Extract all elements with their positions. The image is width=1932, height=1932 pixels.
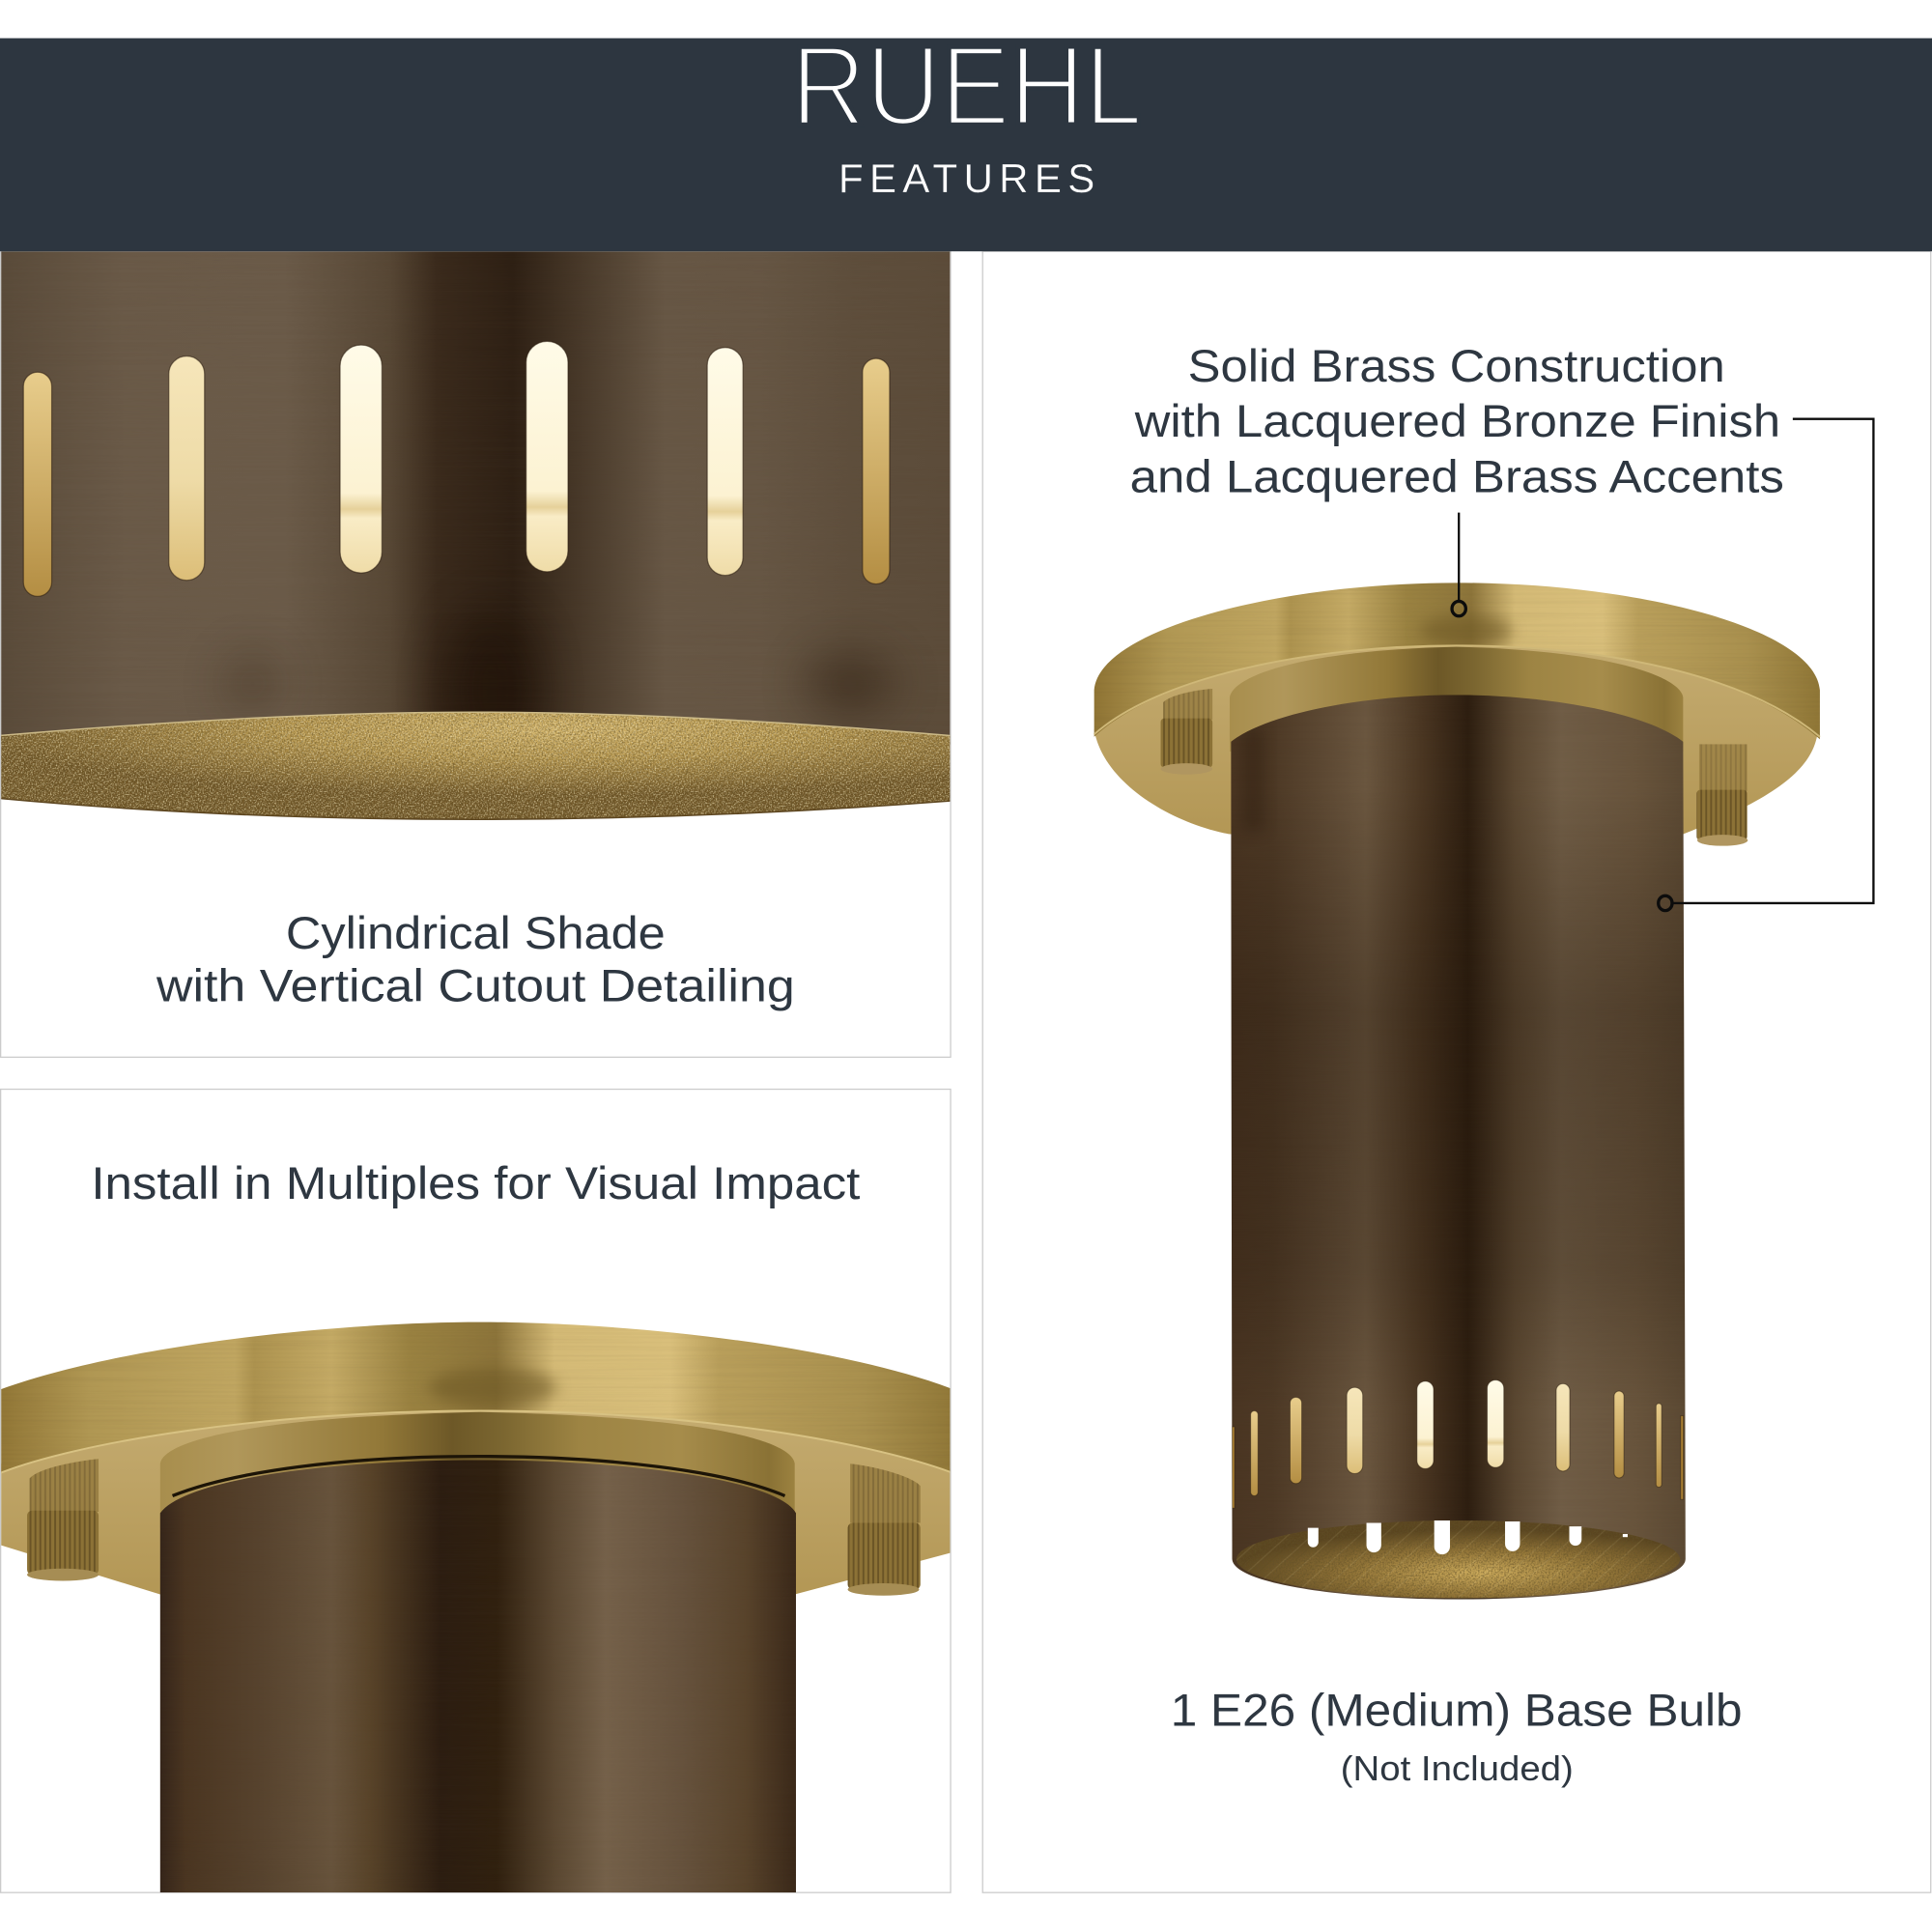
slots in shade <box>23 341 890 596</box>
knob right <box>848 1463 921 1596</box>
bronze cylinder <box>160 1460 796 1892</box>
caption: materials <box>1130 341 1784 503</box>
collar <box>160 1412 795 1513</box>
cylinder slots <box>1233 1380 1684 1508</box>
photo: canopy close-up <box>0 1322 961 1892</box>
header band <box>0 22 1932 251</box>
brand title: RUEHL <box>791 22 1142 149</box>
cylinder interior <box>1236 1520 1680 1598</box>
photo: flush mount fixture <box>1094 582 1820 1608</box>
canopy underside <box>1094 645 1817 835</box>
caption: cylindrical shade: Cylindrical Shade <box>286 908 666 959</box>
canopy underside <box>0 1410 961 1595</box>
caption: bulb type <box>1171 1685 1743 1788</box>
subtitle: FEATURES <box>838 156 1094 201</box>
caption: bulb type: 1 E26 (Medium) Base Bulb <box>1171 1685 1743 1736</box>
note: not included: (Not Included) <box>1341 1749 1574 1788</box>
collar <box>1230 647 1683 752</box>
canopy rim <box>0 1322 961 1476</box>
knob left <box>27 1459 99 1580</box>
panel: full fixture <box>982 251 1931 1892</box>
callout: brass canopy <box>1452 513 1465 616</box>
caption: cylindrical shade <box>156 908 795 1011</box>
photo: shade close-up <box>0 251 950 819</box>
canopy rim <box>1094 582 1820 739</box>
callout: bronze finish <box>1659 419 1873 911</box>
caption: materials: with Lacquered Bronze Finish <box>1134 396 1780 447</box>
caption: cylindrical shade: with Vertical Cutout Detailing <box>156 960 795 1011</box>
caption: install in multiples: Install in Multiples for Visual Impact <box>91 1158 860 1209</box>
caption: materials: and Lacquered Brass Accents <box>1130 452 1784 503</box>
bronze cylinder <box>1226 690 1691 1608</box>
knob left <box>1161 689 1212 775</box>
shade interior <box>0 712 950 819</box>
panel: cylindrical shade <box>0 251 951 1057</box>
caption: materials: Solid Brass Construction <box>1188 341 1725 392</box>
panel: install in multiples <box>0 1090 961 1892</box>
knob right <box>1696 744 1747 846</box>
